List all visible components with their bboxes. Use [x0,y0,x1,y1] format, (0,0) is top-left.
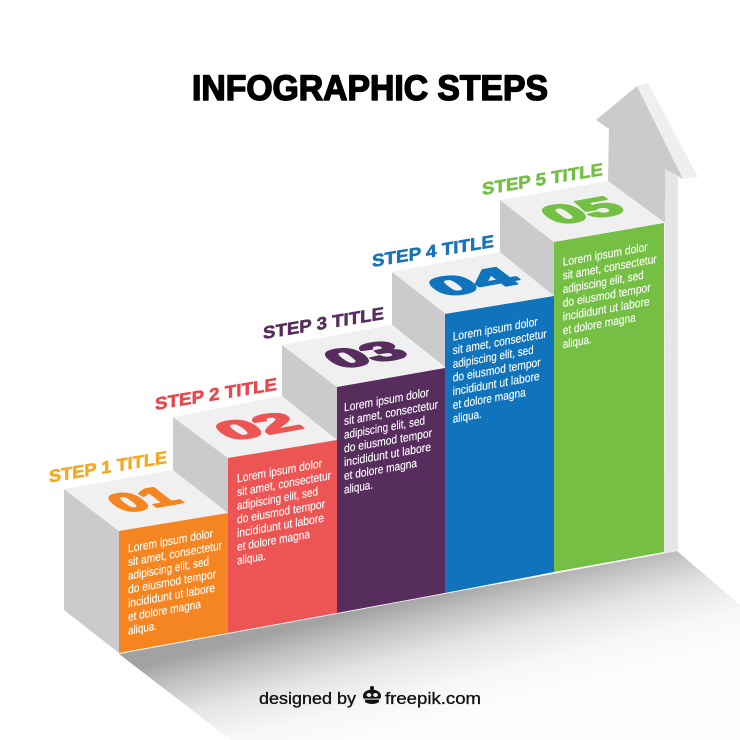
step 1 text [128,525,222,638]
step 3 text: incididunt ut labore [344,440,431,469]
number 02: 02 [203,406,312,446]
step 2 text: et dolore magna [237,527,310,554]
step 3 text: Lorem ipsum dolor [344,385,429,414]
step 4 text: adipiscing elit, sed [453,343,534,371]
step 1 title: STEP 1 TITLE [49,447,167,486]
step 3 title: STEP 3 TITLE [263,303,384,343]
step 4 text: Lorem ipsum dolor [453,314,538,344]
step 5 block [500,181,664,572]
footer credit: designed by [259,689,357,708]
step 4 text: incididunt ut labore [453,369,540,398]
step 5 text: Lorem ipsum dolor [563,240,648,269]
step 5 text: sit amet, consectetur [563,252,657,283]
step 3 text: sit amet, consectetur [344,397,438,428]
number 04: 04 [416,262,530,302]
step 4 text: et dolore magna [453,385,526,412]
step 5 text: do eiusmod tempor [563,280,651,310]
step 3 text [344,384,438,497]
icon: freepik logo [363,686,381,704]
step 1 block [64,470,228,653]
title: INFOGRAPHIC STEPS [192,69,548,108]
step 4 text: do eiusmod tempor [453,355,541,385]
step 1 text: sit amet, consectetur [128,538,222,569]
number 05: 05 [529,191,635,230]
floor shadow [119,551,740,740]
step 5 text: incididunt ut labore [563,294,650,324]
step 3 block [282,325,445,613]
step 2 text: sit amet, consectetur [237,468,331,499]
step 2 block [173,396,337,633]
step 5 title: STEP 5 TITLE [482,159,603,199]
step 3 text: et dolore magna [344,456,417,483]
footer credit [259,686,481,708]
step 5 text [563,238,657,351]
step 1 text: incididunt ut labore [128,581,215,610]
step 1 text: aliqua. [128,619,157,638]
step 1 text: adipiscing elit, sed [128,554,209,583]
step 4 title: STEP 4 TITLE [372,231,494,271]
step 1 text: Lorem ipsum dolor [128,526,213,555]
step 1 text: do eiusmod tempor [128,567,216,597]
step 5 text: et dolore magna [563,310,636,337]
step 2 text: incididunt ut labore [237,511,324,540]
step 4 block [392,252,554,593]
arrow [596,83,698,553]
step 2 title: STEP 2 TITLE [155,374,277,414]
step 3 text: aliqua. [344,478,373,497]
step 2 text: aliqua. [237,549,266,568]
step 3 text: adipiscing elit, sed [344,413,425,442]
number 01: 01 [96,481,191,518]
step 2 text [237,455,331,568]
step 5 text: aliqua. [563,332,592,351]
step 1 text: et dolore magna [128,597,201,624]
step 2 text: do eiusmod tempor [237,497,325,527]
step 2 text: adipiscing elit, sed [237,484,318,513]
number 03: 03 [312,335,418,374]
step 2 text: Lorem ipsum dolor [237,456,322,485]
step 4 text [453,313,547,426]
footer credit: freepik.com [385,689,481,708]
step 3 text: do eiusmod tempor [344,426,432,456]
step 5 text: adipiscing elit, sed [563,268,644,296]
step 4 text: sit amet, consectetur [453,327,547,357]
step 4 text: aliqua. [453,407,482,426]
